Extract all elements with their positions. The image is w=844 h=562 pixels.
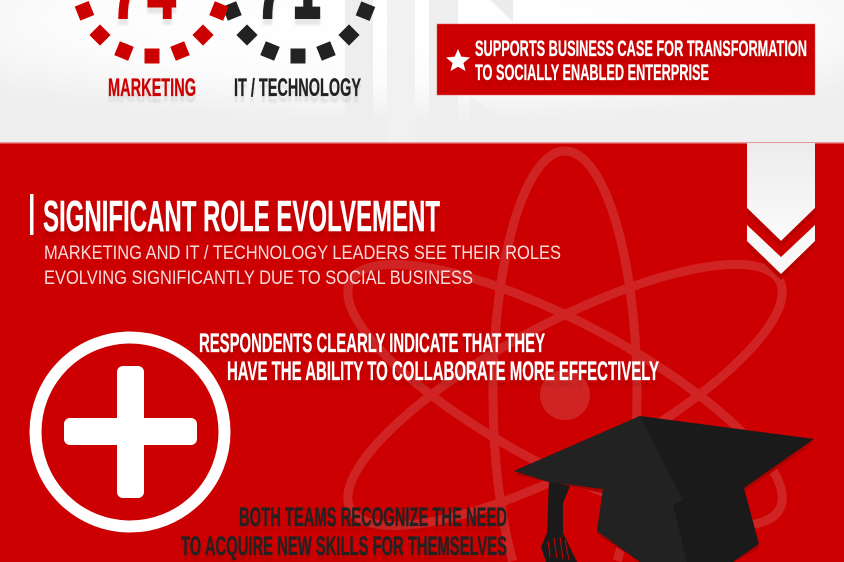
label: marketing: MARKETING (108, 74, 196, 102)
panel: top light background (0, 0, 844, 143)
panel: red section background (0, 142, 844, 562)
text block: collaborate statement: RESPONDENTS CLEARLY INDICATE THAT THEY (199, 328, 545, 358)
chart: IT / technology dial 71 (222, 0, 375, 64)
icon: plus in circle (36, 338, 224, 526)
icon: star (446, 49, 470, 71)
text block: new skills statement (181, 502, 507, 561)
text block: collaborate statement (199, 328, 659, 386)
icon: atom watermark (317, 151, 813, 562)
chart: marketing dial 74 (75, 0, 229, 64)
text block: new skills statement: TO ACQUIRE NEW SKILLS FOR THEMSELVES (181, 531, 507, 561)
text: banner copy (475, 36, 807, 85)
heading: significant role evolvement: SIGNIFICANT ROLE EVOLVEMENT (43, 192, 440, 241)
heading: significant role evolvement (30, 192, 440, 241)
text block: role description: EVOLVING SIGNIFICANTLY DUE TO SOCIAL BUSINESS (44, 268, 473, 289)
text block: role description: MARKETING AND IT / TECHNOLOGY LEADERS SEE THEIR ROLES (44, 243, 561, 264)
text block: new skills statement: BOTH TEAMS RECOGNIZE THE NEED (239, 502, 507, 532)
tassel (541, 481, 577, 562)
icon: graduation cap (514, 416, 814, 562)
callout: business case banner (437, 24, 815, 95)
label: IT / technology: IT / TECHNOLOGY (234, 74, 361, 102)
text block: role description (44, 243, 561, 289)
arrow: down chevrons (747, 143, 815, 280)
